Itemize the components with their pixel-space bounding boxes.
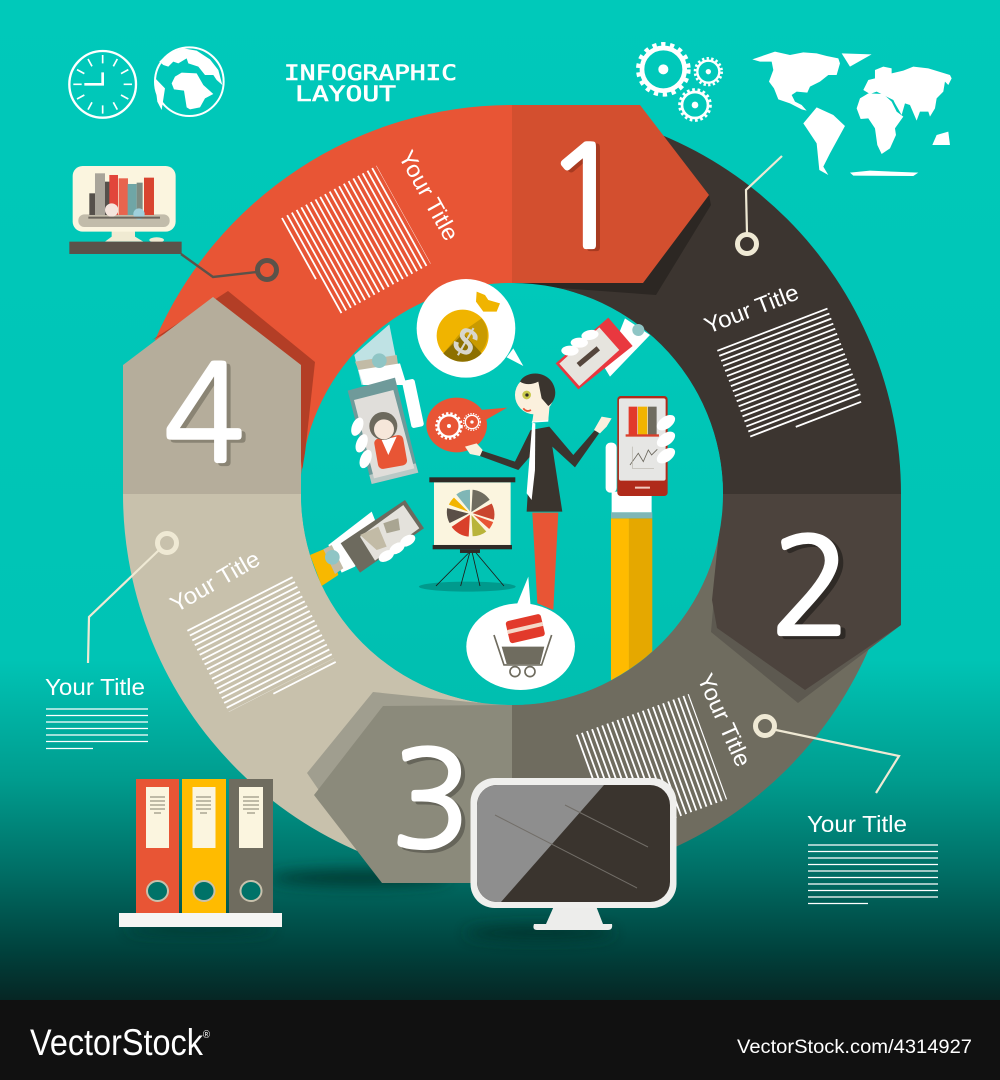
footer logo: VectorStock — [30, 1022, 227, 1063]
shadow under arrow 3 — [307, 692, 512, 860]
text lines: red — [282, 166, 410, 279]
main title: LAYOUT — [295, 82, 396, 106]
segment 2 arc: gray — [512, 494, 901, 883]
speech bubble: money bag: $ — [445, 318, 485, 366]
number 1: 1 — [547, 130, 631, 270]
shadow under arrow 1 — [512, 195, 711, 295]
number 1: 1 — [543, 128, 627, 268]
connector: top left — [181, 254, 276, 280]
speech bubble: shopping cart — [466, 577, 575, 690]
speech bubble: gears — [426, 398, 507, 452]
icon: world map — [752, 52, 952, 176]
footer url: VectorStock.com/4314927 — [737, 1037, 972, 1058]
hand with phone: world map — [310, 500, 424, 586]
large desktop monitor — [470, 778, 676, 930]
number 2: 2 — [776, 524, 856, 657]
floor shadows — [125, 870, 615, 940]
inner circle — [301, 283, 723, 705]
connector: left — [88, 534, 176, 663]
hand with phone: portrait — [348, 324, 424, 484]
callout: left — [45, 674, 148, 748]
segment title: red: Your Title — [394, 146, 464, 245]
circular ring — [123, 105, 901, 883]
number 4: 4 — [164, 348, 244, 481]
segment title: gray: Your Title — [692, 669, 756, 770]
connector: top right — [738, 156, 782, 254]
callout: right: Your Title — [807, 811, 907, 837]
number 3: 3 — [391, 734, 471, 867]
arrow block 2 — [712, 494, 901, 690]
number 2: 2 — [771, 521, 851, 654]
icon: gears — [638, 44, 722, 120]
presentation board with pie chart — [419, 477, 516, 592]
callout: right — [807, 811, 938, 904]
binders on shelf — [119, 779, 282, 927]
shadow under arrow 4 — [152, 291, 315, 472]
binder gray — [229, 779, 273, 913]
icon: globe — [154, 47, 224, 116]
segment 3 arc: beige — [123, 494, 512, 883]
binder red — [136, 779, 179, 913]
text lines: beige — [230, 576, 336, 694]
segment 1 arc: dark brown — [512, 105, 901, 494]
central illustration — [310, 279, 678, 692]
arrow block 3 — [314, 705, 512, 883]
speech bubble: money bag — [417, 279, 523, 378]
shadow under arrow 2 — [711, 494, 901, 703]
icon: desktop city on shelf — [69, 166, 182, 254]
arrow block 1 — [512, 105, 709, 283]
main title — [284, 61, 457, 106]
hand with red phone: right — [606, 396, 678, 692]
number 3: 3 — [395, 737, 475, 870]
businessman — [465, 374, 612, 610]
segment title: beige: Your Title — [166, 545, 264, 617]
arrow block 4 — [123, 297, 301, 494]
icon: clock — [69, 51, 136, 118]
number 4: 4 — [168, 351, 248, 484]
segment 4 arc: red — [155, 105, 512, 475]
text lines: dark — [760, 308, 861, 427]
footer logo: ® — [203, 1029, 210, 1041]
main title: INFOGRAPHIC — [284, 61, 457, 85]
hand with red phone: top right — [556, 318, 650, 389]
footer bar — [0, 1000, 1000, 1080]
binder yellow — [182, 779, 226, 913]
callout: left: Your Title — [45, 674, 145, 700]
connector: right — [756, 716, 899, 793]
shelf — [119, 913, 282, 927]
text lines: gray — [595, 747, 708, 788]
segment title: dark: Your Title — [700, 279, 802, 339]
